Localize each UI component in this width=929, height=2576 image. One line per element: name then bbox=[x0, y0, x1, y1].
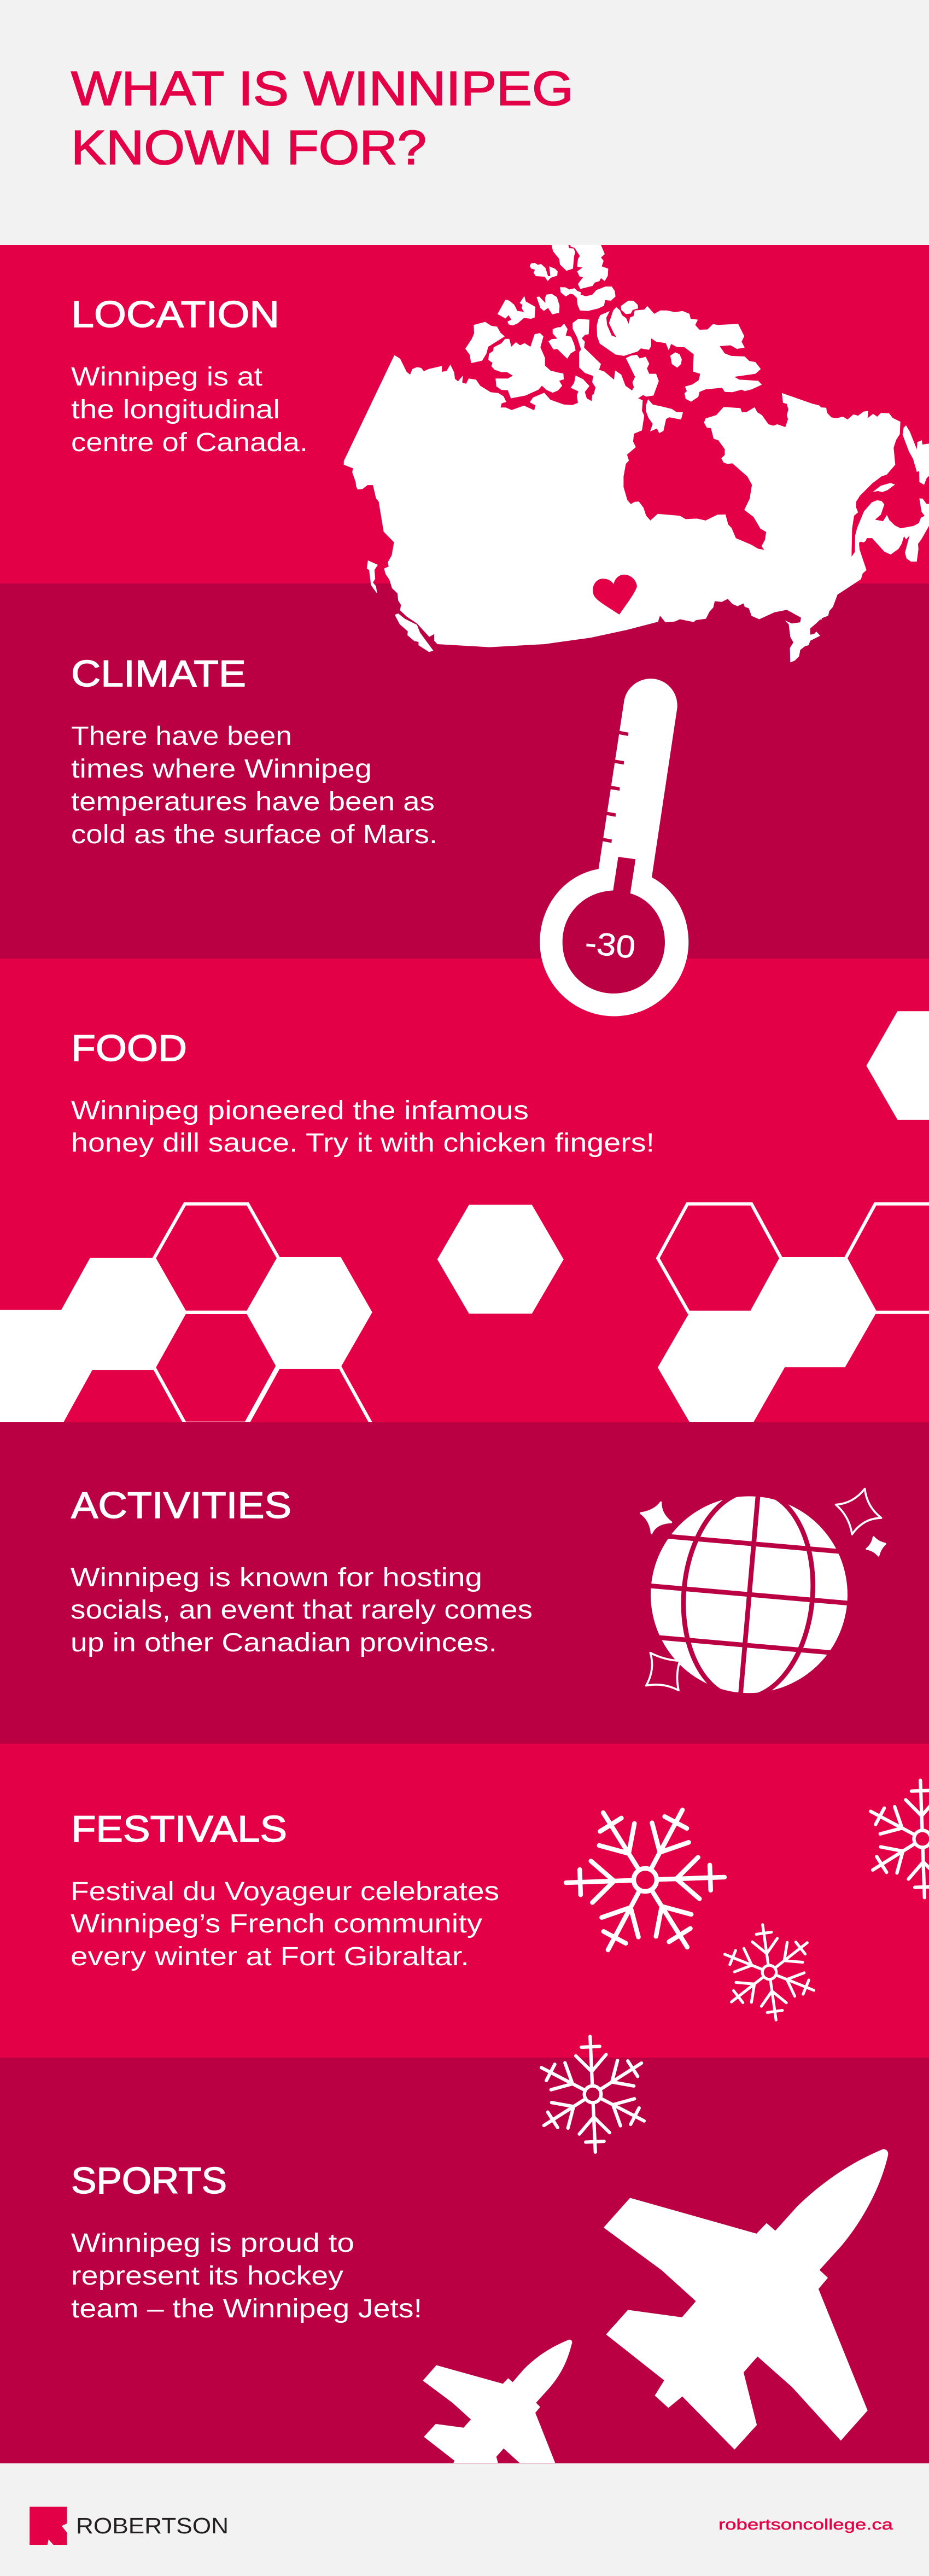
text: climate: cold as the surface of Mars. bbox=[71, 820, 437, 849]
text: location: Winnipeg is at bbox=[71, 363, 262, 392]
website url: robertsoncollege.ca bbox=[718, 2516, 893, 2533]
text: location bbox=[71, 363, 308, 457]
logo mark bbox=[30, 2507, 67, 2545]
text: food: Winnipeg pioneered the infamous bbox=[71, 1096, 529, 1125]
heading: sports: SPORTS bbox=[71, 2160, 227, 2201]
panel: festivals bbox=[0, 1744, 929, 2172]
text: sports: Winnipeg is proud to bbox=[71, 2229, 354, 2258]
icon: heart on Winnipeg bbox=[593, 575, 637, 615]
text: food bbox=[71, 1096, 655, 1158]
text: sports: team – the Winnipeg Jets! bbox=[71, 2294, 422, 2323]
icon: honeycomb hexagons bbox=[0, 1011, 929, 1422]
text: climate: temperatures have been as bbox=[71, 787, 435, 816]
text: activities: socials, an event that rarely comes bbox=[71, 1596, 533, 1625]
text: activities bbox=[71, 1563, 533, 1657]
panel: climate bbox=[0, 583, 929, 1016]
icon: thermometer bbox=[540, 679, 688, 1016]
icon: lower snowflake bbox=[515, 2017, 671, 2172]
text: festivals: every winter at Fort Gibraltar. bbox=[71, 1942, 469, 1971]
heading: location: LOCATION bbox=[71, 294, 279, 335]
title bbox=[71, 61, 574, 174]
title: KNOWN FOR? bbox=[71, 120, 426, 174]
icon: two jets bbox=[423, 2149, 888, 2463]
panel: sports bbox=[0, 2058, 929, 2463]
label: -30: -30 bbox=[583, 925, 637, 966]
text: climate: There have been bbox=[71, 722, 292, 751]
text: location: the longitudinal bbox=[71, 395, 280, 424]
heading: food: FOOD bbox=[71, 1027, 187, 1069]
text: food: honey dill sauce. Try it with chicken fingers! bbox=[71, 1129, 655, 1158]
heading: activities: ACTIVITIES bbox=[71, 1485, 291, 1526]
text: sports: represent its hockey bbox=[71, 2262, 343, 2291]
text: sports bbox=[71, 2229, 422, 2323]
icon: small snowflake bbox=[707, 1910, 832, 2035]
footer bbox=[0, 2463, 929, 2576]
text: activities: up in other Canadian provinces. bbox=[71, 1628, 497, 1657]
text: activities: Winnipeg is known for hosting bbox=[71, 1563, 482, 1592]
icon: disco ball with sparkles bbox=[641, 1485, 885, 1703]
panel: location bbox=[0, 245, 929, 663]
text: festivals: Winnipeg’s French community bbox=[71, 1909, 482, 1938]
icon: map of Canada bbox=[344, 245, 929, 663]
icon: large snowflake bbox=[563, 1798, 727, 1962]
title: WHAT IS WINNIPEG bbox=[71, 61, 574, 115]
logo wordmark: ROBERTSON bbox=[76, 2513, 229, 2538]
heading: climate: CLIMATE bbox=[71, 653, 246, 694]
icon: edge snowflake bbox=[843, 1760, 929, 1918]
text: location: centre of Canada. bbox=[71, 428, 308, 457]
text: climate bbox=[71, 722, 437, 849]
panel: food bbox=[0, 1011, 929, 1422]
heading: festivals: FESTIVALS bbox=[71, 1808, 287, 1850]
text: climate: times where Winnipeg bbox=[71, 755, 372, 784]
text: festivals bbox=[71, 1877, 499, 1971]
panel: activities bbox=[0, 1422, 929, 1744]
text: festivals: Festival du Voyageur celebrates bbox=[71, 1877, 499, 1906]
